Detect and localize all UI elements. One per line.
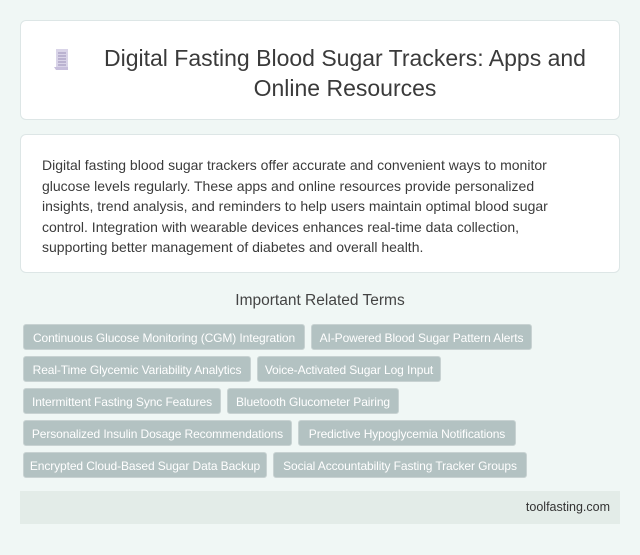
tag list: Encrypted Cloud-Based Sugar Data Backup (30, 459, 260, 473)
title: Digital Fasting Blood Sugar Trackers: Apps and Online Resources (104, 45, 586, 101)
description panel (20, 134, 620, 273)
tag list: AI-Powered Blood Sugar Pattern Alerts (320, 331, 523, 345)
tag list (23, 324, 532, 478)
tag list: Bluetooth Glucometer Pairing (236, 395, 390, 409)
footer (20, 491, 620, 524)
icon: document (54, 49, 68, 70)
tag list: Intermittent Fasting Sync Features (32, 395, 212, 409)
description text: Digital fasting blood sugar trackers offer accurate and convenient ways to monitor glucose levels regularly. These apps and online resources provide personalized insights, trend analysis, and reminders to help users maintain optimal blood sugar control. Integration with wearable devices enhances real-time data collection, supporting better management of diabetes and overall health. (42, 157, 548, 255)
footer source text: toolfasting.com (526, 500, 610, 514)
tag list: Predictive Hypoglycemia Notifications (309, 427, 505, 441)
tag list: Continuous Glucose Monitoring (CGM) Integration (33, 331, 295, 345)
tag list: Real-Time Glycemic Variability Analytics (33, 363, 241, 377)
tag list: Social Accountability Fasting Tracker Groups (283, 459, 517, 473)
header panel (20, 20, 620, 120)
heading: important related terms: Important Related Terms (235, 292, 405, 309)
tag list: Personalized Insulin Dosage Recommendations (32, 427, 283, 441)
tag list: Voice-Activated Sugar Log Input (265, 363, 433, 377)
